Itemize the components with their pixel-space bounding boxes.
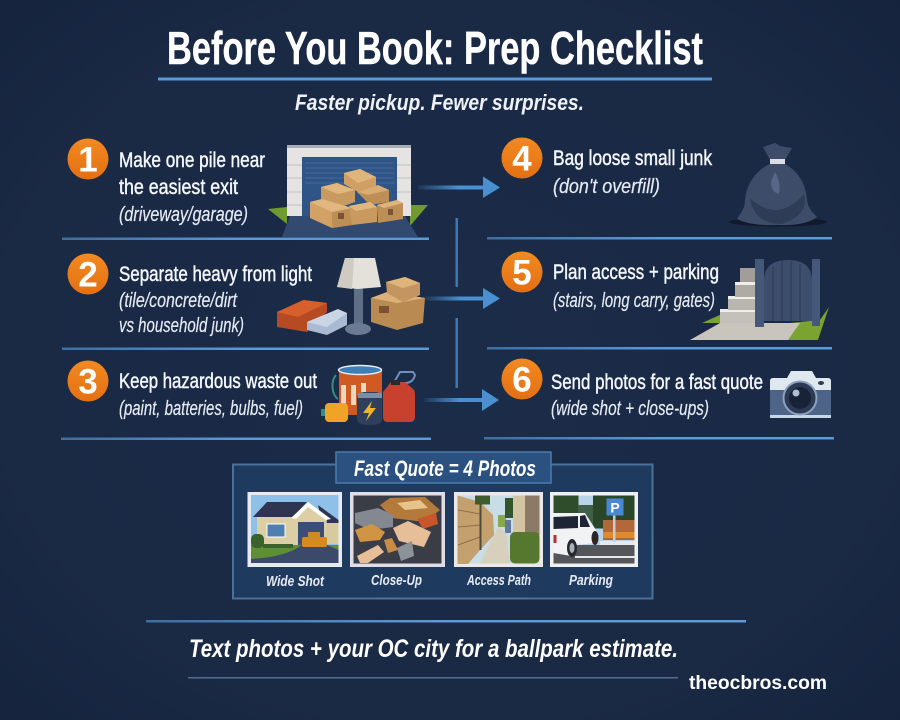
- photo: close-up: [350, 492, 445, 567]
- number badge 1: [68, 138, 108, 180]
- step 6 text: [551, 371, 763, 420]
- step 4: bag loose small junk: [502, 138, 827, 226]
- step 4 text: (don't overfill): [553, 176, 660, 198]
- step 1 text: [119, 149, 265, 226]
- icon: camera: [770, 371, 831, 418]
- icon: garage with boxes: [268, 145, 428, 237]
- panel: fast quote: [233, 452, 652, 598]
- step 1 text: (driveway/garage): [119, 204, 248, 226]
- caption: close-up: Close-Up: [371, 572, 422, 589]
- photo: parking: P: [610, 500, 620, 516]
- arrow: step 2 to 5: [425, 288, 500, 309]
- step 6 text: Send photos for a fast quote: [551, 371, 763, 394]
- divider: bottom of footer: [188, 677, 678, 678]
- caption: access path: Access Path: [466, 572, 531, 589]
- arrow: step 3 to 6: [424, 389, 499, 411]
- number badge 2: [68, 254, 108, 294]
- panel tab heading: [336, 452, 551, 483]
- number badge 6: [502, 358, 542, 400]
- photo: wide shot: [248, 492, 342, 567]
- step 2 text: [119, 263, 312, 337]
- step 1 text: Make one pile near: [119, 149, 265, 172]
- photo: parking: [550, 492, 638, 567]
- number badge 2: 2: [78, 256, 98, 294]
- number badge 3: [68, 360, 108, 402]
- step 5 text: (stairs, long carry, gates): [553, 290, 715, 312]
- connector: vertical upper: [456, 218, 458, 287]
- step 2: separate heavy from light: [68, 254, 425, 337]
- icon: trash bag: [729, 143, 827, 226]
- number badge 4: 4: [512, 140, 532, 178]
- title: [158, 22, 712, 80]
- number badge 1: 1: [78, 140, 98, 180]
- step 3 text: [119, 370, 317, 420]
- icon: steps and gate: [690, 259, 829, 340]
- footer call to action: Text photos + your OC city for a ballpark estimate.: [189, 635, 678, 663]
- step 5 text: [553, 261, 719, 312]
- step 4 text: [553, 147, 712, 198]
- step 3: keep hazardous waste out: [68, 360, 415, 425]
- step 3 text: (paint, batteries, bulbs, fuel): [119, 398, 303, 420]
- number badge 6: 6: [512, 360, 532, 400]
- photo: access path: [454, 492, 543, 567]
- caption: wide shot: Wide Shot: [266, 573, 325, 590]
- arrow: step 1 to 4: [418, 176, 500, 198]
- step 5 text: Plan access + parking: [553, 261, 719, 284]
- divider: top of footer: [146, 620, 746, 622]
- icon: paint, battery and fuel can: [321, 366, 415, 425]
- title: Before You Book: Prep Checklist: [167, 22, 703, 74]
- divider 2: [62, 348, 429, 350]
- number badge 4: [502, 138, 542, 178]
- subtitle: Faster pickup. Fewer surprises.: [295, 90, 584, 115]
- step 3 text: Keep hazardous waste out: [119, 370, 317, 393]
- caption: parking: Parking: [569, 572, 613, 589]
- step 4 text: Bag loose small junk: [553, 147, 712, 170]
- step 2 text: Separate heavy from light: [119, 263, 312, 286]
- panel tab heading: Fast Quote = 4 Photos: [354, 456, 536, 481]
- website: theocbros.com: [689, 673, 827, 694]
- icon: brick, lamp and boxes: [277, 258, 425, 335]
- step 6 text: (wide shot + close-ups): [551, 398, 709, 420]
- divider 5: [487, 347, 832, 350]
- step 2 text: vs household junk): [119, 315, 244, 337]
- divider 1: [62, 238, 429, 240]
- step 1 text: the easiest exit: [119, 176, 238, 199]
- step 2 text: (tile/concrete/dirt: [119, 290, 238, 312]
- number badge 5: 5: [512, 254, 532, 292]
- divider 3: [61, 438, 431, 440]
- number badge 5: [502, 252, 542, 292]
- step 6: send photos: [502, 358, 831, 420]
- connector: vertical lower: [456, 318, 458, 388]
- step 1: make one pile: [68, 138, 428, 237]
- number badge 3: 3: [78, 362, 98, 402]
- divider 6: [484, 437, 834, 440]
- step 5: plan access + parking: [502, 252, 829, 340]
- divider 4: [487, 237, 832, 240]
